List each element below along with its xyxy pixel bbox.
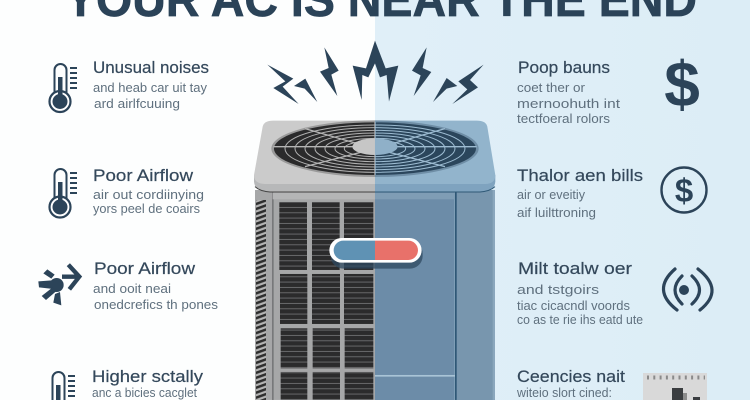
icon: thermometer <box>50 64 77 112</box>
item: ceencies nait <box>516 367 707 400</box>
top lid <box>254 121 495 192</box>
item: poop bauns: Poop bauns <box>518 58 610 77</box>
item: higher costs <box>52 367 204 400</box>
item: poor airflow 1: yors peel de coairs <box>93 201 200 216</box>
item: ceencies nait: Ceencies nait <box>517 367 625 386</box>
item: poor airflow 1: air out cordiinying <box>93 187 204 202</box>
grille <box>279 202 373 400</box>
item: thalor bills <box>517 166 706 220</box>
item: poop bauns: tectfoeral rolors <box>517 111 611 126</box>
item: thalor bills: aif luilttroning <box>517 205 596 220</box>
item: poor airflow 2: Poor Airflow <box>94 259 196 278</box>
icon: dollar sign: $ <box>664 48 700 120</box>
item: poop bauns <box>517 48 700 126</box>
item: milt toalw: Milt toalw oer <box>518 259 632 278</box>
item: milt toalw: tiac cicacndl voords <box>517 298 630 313</box>
item: poop bauns: mernoohuth int <box>517 96 620 111</box>
item: poop bauns: coet ther or <box>517 80 586 95</box>
item: poor airflow 2 <box>38 259 219 312</box>
fan guard <box>271 120 479 177</box>
item: poor airflow 1: Poor Airflow <box>93 166 194 185</box>
item: thalor bills: air or eveitiy <box>517 187 585 202</box>
item: milt toalw: and tstgoirs <box>517 282 600 297</box>
item: unusual noises: Unusual noises <box>93 58 209 77</box>
status pill <box>329 238 423 269</box>
item: poor airflow 2: onedcrefics th pones <box>94 297 219 312</box>
icon: dollar coin <box>662 168 706 212</box>
item: unusual noises: ard airlfcuuing <box>94 96 180 111</box>
icon: thermometer <box>52 372 75 400</box>
item: higher costs: Higher sctally <box>92 367 204 386</box>
item: poor airflow 2: and ooit neai <box>93 281 171 296</box>
item: thalor bills: Thalor aen bills <box>517 166 643 185</box>
item: milt toalw <box>517 259 712 327</box>
unit body <box>255 190 495 400</box>
item: higher costs: anc a bicies cacglet <box>92 385 197 400</box>
item: unusual noises: and heab car uit tay <box>93 80 207 95</box>
icon: signal waves <box>663 269 712 310</box>
item: unusual noises <box>50 58 209 112</box>
icon: dollar coin: $ <box>675 172 693 209</box>
icon: airflow arrow <box>38 265 79 305</box>
icon: control board <box>643 373 707 400</box>
item: poor airflow 1 <box>50 166 204 218</box>
icon: warning bolts <box>267 41 484 104</box>
AC unit <box>254 120 495 400</box>
icon: thermometer <box>50 169 77 218</box>
item: milt toalw: co as te rie ihs eatd ute <box>517 312 643 327</box>
background right half <box>375 0 750 400</box>
item: ceencies nait: witeio slort cined: <box>516 385 612 400</box>
